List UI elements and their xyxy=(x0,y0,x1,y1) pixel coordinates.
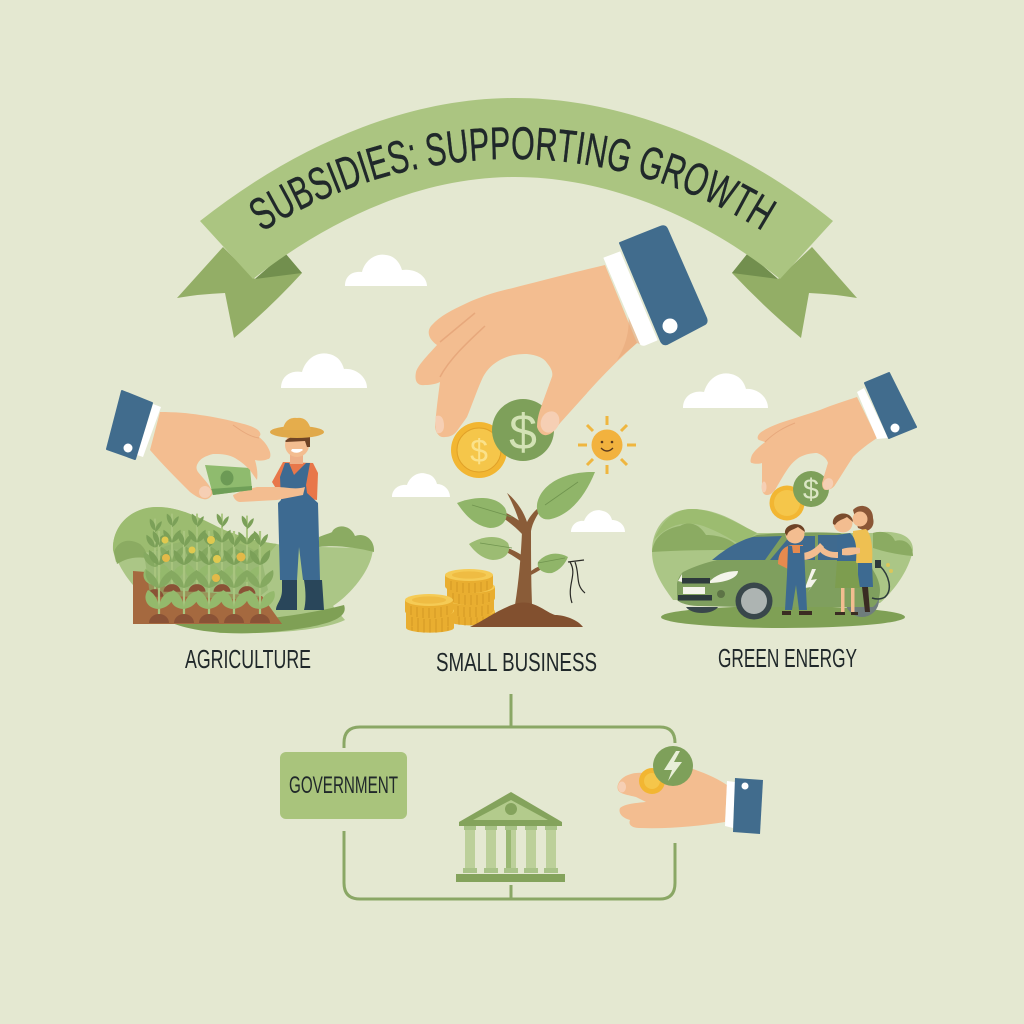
jacket sleeve xyxy=(865,373,916,438)
ground xyxy=(172,605,345,633)
straw hat xyxy=(270,426,324,438)
front left wheel xyxy=(686,607,718,613)
shirt cuff xyxy=(725,781,735,828)
face xyxy=(852,512,868,526)
blouse xyxy=(853,529,872,563)
sapling xyxy=(457,472,595,605)
flow bracket xyxy=(344,694,675,899)
shirt xyxy=(778,545,804,570)
thumb xyxy=(537,375,587,435)
jacket sleeve xyxy=(733,778,763,834)
crop foliage xyxy=(145,539,268,600)
label: green energy: GREEN ENERGY xyxy=(718,643,857,673)
car windows xyxy=(712,536,782,560)
crop rows xyxy=(143,514,275,623)
title banner xyxy=(177,98,857,338)
shirt cuff xyxy=(857,388,888,439)
hand xyxy=(617,768,727,828)
neck and face xyxy=(290,452,303,464)
central hand with coins: $ xyxy=(470,433,488,469)
charger xyxy=(872,566,889,599)
green coin xyxy=(793,471,829,507)
label: agriculture: AGRICULTURE xyxy=(185,644,311,674)
legs xyxy=(862,587,870,612)
label: small business: SMALL BUSINESS xyxy=(436,647,597,677)
shoes xyxy=(782,611,812,615)
legs xyxy=(841,588,844,612)
central hand with coins xyxy=(415,226,707,478)
field xyxy=(652,509,913,603)
hand xyxy=(750,397,877,495)
banner ribbon xyxy=(200,98,833,279)
upper left leaf xyxy=(457,498,507,528)
bank building xyxy=(456,792,565,882)
green energy scene xyxy=(652,506,913,628)
bottom hand with energy coin xyxy=(617,746,763,834)
energy coin xyxy=(653,746,693,786)
agriculture hand with banknote xyxy=(107,391,270,499)
agriculture scene xyxy=(113,418,374,633)
grille xyxy=(682,578,710,584)
head xyxy=(834,514,852,532)
overalls xyxy=(278,463,320,580)
shirt cuff xyxy=(137,404,161,457)
jacket sleeve xyxy=(107,391,152,459)
gold coin xyxy=(639,768,665,794)
clouds xyxy=(281,255,768,532)
green energy hand with coins xyxy=(750,373,916,520)
index nail xyxy=(435,416,444,433)
field xyxy=(113,507,373,633)
jacket sleeve xyxy=(620,226,707,344)
ground xyxy=(661,606,905,628)
skirt xyxy=(835,561,860,588)
gold coin xyxy=(770,486,804,520)
soil mound xyxy=(470,603,583,627)
bushes xyxy=(652,523,740,552)
coin stacks xyxy=(405,569,495,633)
boy xyxy=(778,524,824,615)
hill xyxy=(113,507,277,562)
hair xyxy=(853,506,874,531)
hand xyxy=(415,265,637,437)
arm xyxy=(233,487,305,502)
lower right leaf xyxy=(538,554,568,573)
thumb nail xyxy=(537,408,563,436)
banner left tail xyxy=(177,247,302,338)
sun xyxy=(578,416,636,474)
banner left fold xyxy=(255,253,302,279)
upper right leaf xyxy=(537,472,595,519)
hand xyxy=(150,412,270,499)
farmer xyxy=(233,418,324,610)
skirt xyxy=(858,563,873,587)
banknote xyxy=(205,465,252,495)
soil beds xyxy=(133,571,282,624)
green energy hand with coins: $ xyxy=(803,474,819,506)
headlight xyxy=(708,571,738,583)
car xyxy=(677,532,893,620)
dry roots xyxy=(568,560,585,603)
central hand with coins: $ xyxy=(509,404,537,460)
lightning xyxy=(805,569,817,593)
overalls xyxy=(785,546,807,610)
main wheel xyxy=(736,582,772,620)
shoes xyxy=(835,612,858,615)
daughter xyxy=(818,514,860,615)
torso xyxy=(837,533,856,562)
thumb nail xyxy=(199,486,211,498)
head xyxy=(786,524,804,544)
government box: GOVERNMENT xyxy=(289,772,398,799)
government box xyxy=(280,752,407,819)
green coin xyxy=(492,399,554,461)
labels xyxy=(185,643,857,677)
middle left leaf xyxy=(469,537,509,560)
thumb xyxy=(822,463,844,490)
shirt xyxy=(272,462,318,500)
shirt cuff xyxy=(604,252,657,345)
trunk and branches xyxy=(480,493,549,605)
bushes xyxy=(319,526,374,552)
boots xyxy=(276,580,297,610)
body xyxy=(677,532,880,607)
rear wheel xyxy=(845,583,879,617)
banner right tail xyxy=(732,247,857,338)
mother xyxy=(852,506,874,612)
banner right fold xyxy=(732,253,778,279)
arms xyxy=(818,546,860,558)
arm to handshake xyxy=(803,543,824,560)
gold coin xyxy=(451,422,507,478)
title: SUBSIDIES: SUPPORTING GROWTH xyxy=(250,126,777,230)
